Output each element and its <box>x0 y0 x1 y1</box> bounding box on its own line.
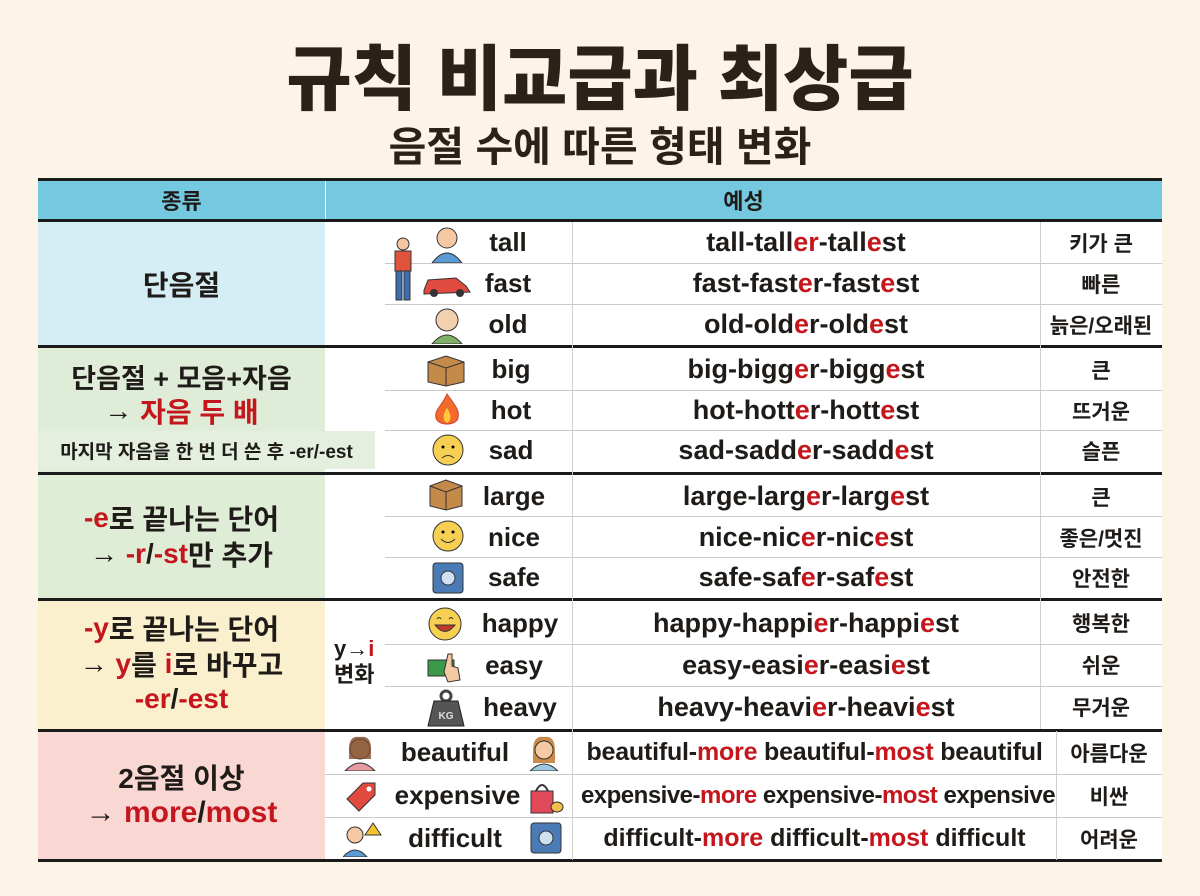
examples column: big-bigg r-bigg st <box>687 354 925 384</box>
examples column: hot-hott r-hott st <box>693 395 919 425</box>
examples column: safe-saf r-saf st <box>699 562 913 592</box>
meanings column: 키가 큰 <box>1069 232 1133 256</box>
meanings column: 좋은/멋진 <box>1059 528 1143 550</box>
words column: nice <box>488 522 540 552</box>
header row: 종류 <box>161 189 202 214</box>
examples column: e <box>806 481 821 511</box>
words column: big <box>492 354 530 384</box>
section 5 rows: 비싼 <box>1090 786 1128 808</box>
examples column: nice-nic r-nic st <box>699 522 913 552</box>
table <box>38 178 1162 862</box>
section 5 rows: difficult <box>408 823 502 853</box>
examples column: e <box>920 608 935 638</box>
meanings column: 행복한 <box>1072 613 1130 636</box>
examples column: e <box>794 309 809 339</box>
examples column: e <box>895 435 910 465</box>
examples column: happy-happi r-happi st <box>653 608 959 638</box>
section 5 rows: expensive <box>395 780 520 810</box>
panel: 자음 두 배: 자음 두 배 <box>140 397 259 428</box>
examples column: e <box>797 435 812 465</box>
section 5 rows: most <box>869 824 928 852</box>
icons column 1 <box>424 228 471 726</box>
icon: standing person <box>394 238 412 300</box>
meanings column: 슬픈 <box>1082 440 1120 464</box>
examples column: e <box>867 227 882 257</box>
meanings column: 무거운 <box>1072 697 1130 720</box>
words column: safe <box>488 562 540 592</box>
panel: -y로 끝나는 단어: → 를 로 바꾸고 <box>80 648 283 681</box>
panel: 자음 두 배: 마지막 자음을 한 번 더 쓴 후 -er/-est <box>60 442 353 462</box>
meanings column: 쉬운 <box>1082 655 1120 678</box>
words column: happy <box>482 608 558 638</box>
examples column: e <box>916 692 931 722</box>
meanings column: 안전한 <box>1072 568 1130 590</box>
panel: 자음 두 배: 단음절 + 모음+자음 <box>71 364 292 394</box>
title: 규칙 비교급과 최상급 <box>286 41 914 120</box>
words column: tall <box>489 227 527 257</box>
panel: 2음절 이상: most <box>206 796 277 829</box>
label: y→i 변화 <box>334 636 374 687</box>
panel: -y로 끝나는 단어: i <box>165 648 172 679</box>
words column: heavy <box>483 692 557 722</box>
panel: 자음 두 배 <box>60 364 375 469</box>
section 5 rows: difficult- difficult- difficult <box>603 824 1026 852</box>
panel: -e로 끝나는 단어: -e <box>84 502 109 533</box>
examples column: e <box>812 692 827 722</box>
meanings column: 늙은/오래된 <box>1050 314 1152 338</box>
examples column: e <box>795 395 810 425</box>
examples column: e <box>874 562 889 592</box>
examples column: e <box>801 522 816 552</box>
meanings column <box>1050 232 1152 720</box>
section 5 rows: expensive- expensive- expensive <box>581 782 1055 808</box>
examples column: e <box>874 522 889 552</box>
examples column: fast-fast r-fast st <box>693 268 919 298</box>
meanings column: 빠른 <box>1082 274 1120 296</box>
words column: easy <box>485 650 543 680</box>
examples column: old-old r-old st <box>704 309 908 339</box>
examples column: tall-tall -tall st <box>706 227 906 257</box>
section 5 rows <box>343 736 1148 857</box>
examples column: heavy-heavi r-heavi st <box>657 692 955 722</box>
meanings column: 큰 <box>1091 360 1111 382</box>
section 5 rows: most <box>875 738 933 766</box>
panel: -y로 끝나는 단어: -er <box>135 683 171 714</box>
panel: -e로 끝나는 단어 <box>84 502 279 571</box>
panel: 2음절 이상: → / <box>86 796 206 829</box>
row lines <box>385 263 1162 264</box>
examples column: e <box>794 354 809 384</box>
left cells backgrounds <box>38 222 325 346</box>
section 5 rows: more <box>700 782 757 808</box>
examples column: e <box>813 608 828 638</box>
section 5 rows: beautiful- beautiful- beautiful <box>586 738 1043 766</box>
examples column: er <box>793 227 819 257</box>
panel: -y로 끝나는 단어: -y <box>84 612 109 643</box>
examples column: e <box>880 268 895 298</box>
words column: fast <box>485 268 531 298</box>
examples column: e <box>890 481 905 511</box>
section 5 rows: 아름다운 <box>1070 742 1148 766</box>
panel: -e로 끝나는 단어: -r <box>126 538 146 569</box>
panel: -y로 끝나는 단어: y <box>116 648 131 679</box>
examples column: e <box>891 650 906 680</box>
examples column: e <box>885 354 900 384</box>
column lines <box>572 222 573 860</box>
panel: 2음절 이상 <box>86 763 277 829</box>
examples column: e <box>804 650 819 680</box>
section 5 rows: more <box>697 738 757 766</box>
examples column: e <box>798 268 813 298</box>
panel: 2음절 이상: 2음절 이상 <box>118 763 245 794</box>
panel: -y로 끝나는 단어 <box>80 612 374 714</box>
panel: 단음절: 단음절 <box>143 270 220 301</box>
section lines <box>38 345 1162 348</box>
section 5 rows: more <box>702 824 763 852</box>
meanings column: 큰 <box>1091 486 1111 510</box>
examples column: e <box>880 395 895 425</box>
panel: -e로 끝나는 단어: → / 만 추가 <box>90 538 273 571</box>
meanings column: 뜨거운 <box>1072 400 1130 424</box>
panel: -e로 끝나는 단어: 로 끝나는 단어 <box>109 504 279 535</box>
section 5 rows: 어려운 <box>1080 828 1138 852</box>
panel: 2음절 이상: more <box>124 796 197 829</box>
label: y→i 변화: 변화 <box>334 662 374 687</box>
label: y→i 변화: y→i <box>334 636 374 661</box>
section 5 rows: beautiful <box>401 737 509 767</box>
section 5 rows: most <box>882 782 937 808</box>
panel: -y로 끝나는 단어: 로 끝나는 단어 <box>109 614 279 645</box>
examples column: e <box>801 562 816 592</box>
examples column: easy-easi r-easi st <box>682 650 930 680</box>
panel: -y로 끝나는 단어: / <box>171 683 178 714</box>
examples column <box>653 227 959 722</box>
icons column 1: KG <box>438 711 454 722</box>
words column: hot <box>491 395 531 425</box>
examples column: sad-sadd r-sadd st <box>678 435 934 465</box>
words column <box>482 227 558 722</box>
panel: -e로 끝나는 단어: -st <box>154 538 188 569</box>
words column: old <box>488 309 528 339</box>
header row <box>38 178 1162 222</box>
examples column: e <box>869 309 884 339</box>
panel: -y로 끝나는 단어: -est <box>178 683 228 714</box>
words column: large <box>483 481 545 511</box>
words column: sad <box>489 435 533 465</box>
subtitle: 음절 수에 따른 형태 변화 <box>389 124 811 170</box>
examples column: large-larg r-larg st <box>683 481 929 511</box>
panel: 자음 두 배: → <box>104 395 132 426</box>
header row: 예성 <box>723 189 764 214</box>
